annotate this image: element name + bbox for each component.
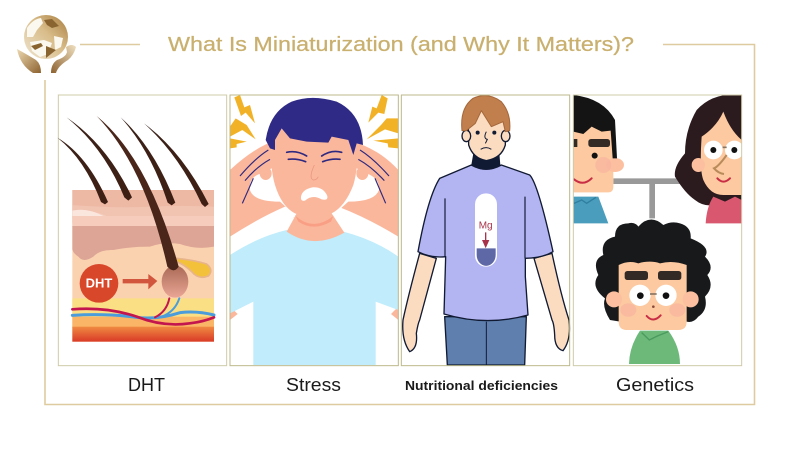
father (573, 95, 624, 223)
nose (311, 165, 318, 180)
blood vessels (72, 298, 214, 324)
panel: Nutritional deficiencies (401, 95, 570, 366)
DHT badge (80, 264, 118, 303)
skin cross-section (72, 190, 214, 342)
child (595, 220, 711, 364)
label: Nutritional deficiencies: Nutritional deficiencies (405, 378, 558, 393)
label: Stress: Stress (286, 375, 341, 395)
neck (287, 213, 344, 241)
face details (481, 132, 491, 149)
follicle (162, 266, 188, 298)
main hair shaft (97, 116, 179, 270)
outer frame lines (45, 44, 754, 404)
sleeves white (230, 207, 398, 257)
family connector (613, 178, 680, 218)
shirt (418, 165, 553, 321)
panel: DHT (57, 95, 227, 366)
mother (675, 94, 744, 223)
brows and eyes (287, 151, 342, 162)
magnesium capsule (475, 193, 497, 267)
mouth (301, 187, 327, 201)
hair (462, 96, 510, 132)
sebaceous gland (177, 258, 211, 277)
face (270, 123, 358, 217)
title: What Is Miniaturization (and Why It Matters)? (168, 34, 634, 56)
arms (403, 253, 436, 352)
panel: Stress (230, 95, 398, 366)
hairs (57, 117, 209, 207)
label: DHT: DHT (128, 375, 165, 395)
logo: globe in hands (17, 15, 76, 73)
lightning left (230, 95, 256, 148)
DHT badge: DHT (86, 276, 112, 291)
jeans (445, 317, 526, 365)
arms and hands (230, 143, 398, 320)
lightning right (367, 95, 398, 148)
face (468, 110, 505, 161)
hair (266, 98, 363, 155)
neck (472, 153, 500, 169)
label: Genetics: Genetics (616, 375, 694, 395)
hand finger lines (240, 150, 389, 203)
arrow (123, 274, 157, 289)
shirt (230, 230, 398, 365)
panel: Genetics (573, 94, 744, 366)
magnesium capsule: Mg (479, 220, 493, 231)
